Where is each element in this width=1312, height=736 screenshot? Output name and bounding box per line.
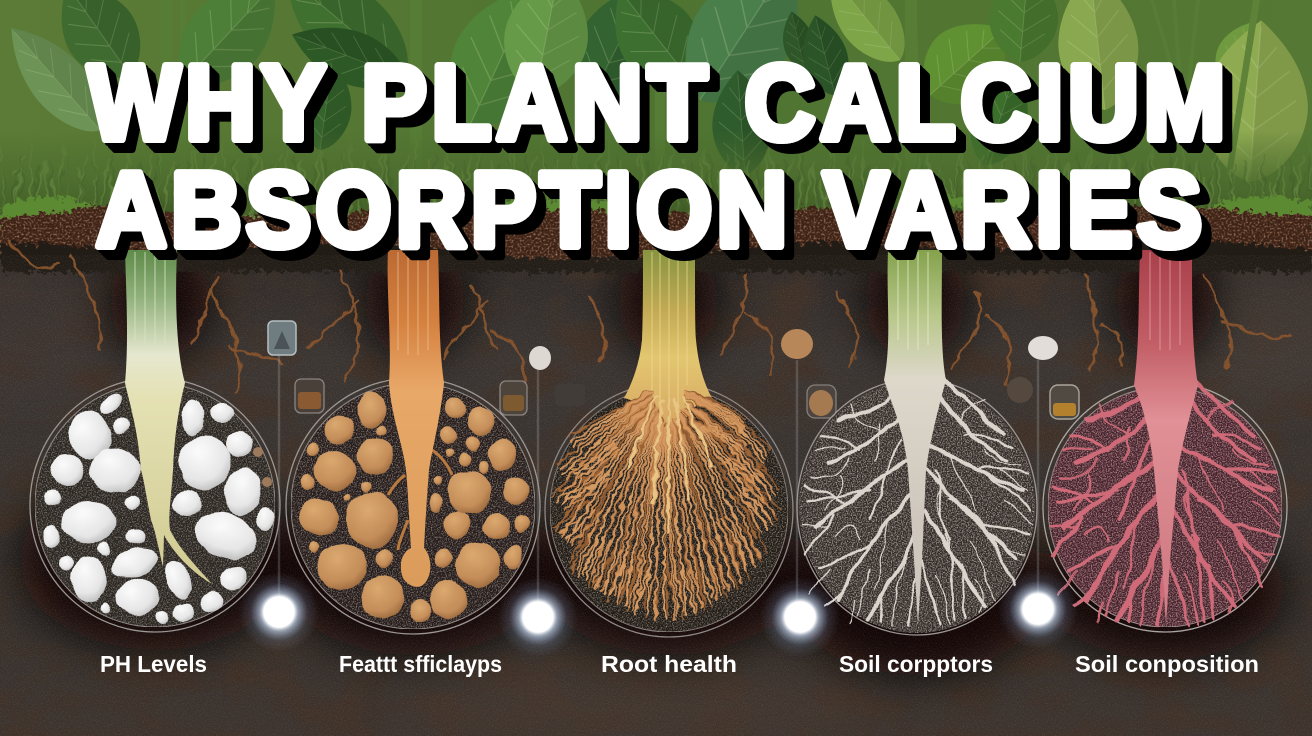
indicator lines [279, 350, 1038, 604]
label: PH Levels [100, 651, 207, 677]
panel disc [797, 379, 1037, 635]
plant stem and taproot [388, 250, 452, 587]
label: Feattt sfficlayps [339, 651, 502, 677]
icon: glass jar 2 [295, 379, 324, 413]
panel disc [30, 378, 280, 632]
panel: soil composition [1043, 250, 1287, 677]
panel: soil factors [797, 250, 1037, 677]
pink branching roots [1050, 380, 1281, 626]
title: ABSORPTION VARIES [96, 150, 1202, 269]
probes and sample jars [268, 321, 1079, 604]
plant stem and taproot [884, 250, 946, 625]
dense fibrous roots [542, 383, 789, 629]
label: Soil conposition [1075, 651, 1259, 677]
icon: tan pebble [781, 329, 813, 359]
white branching roots [802, 380, 1032, 625]
icon: glass jar 3 [500, 381, 527, 415]
plant stem flare [624, 250, 712, 430]
topsoil crumbs [0, 206, 1312, 262]
grass band [0, 130, 1312, 220]
icon: dim stones [1007, 377, 1033, 403]
title: WHY PLANT CALCIUM [88, 43, 1225, 162]
soil rootlets [8, 240, 1290, 395]
dark shadows behind panels [20, 240, 1285, 675]
white calcium rocks [44, 390, 273, 623]
panel: pH levels [30, 250, 280, 677]
foliage leaves [0, 0, 1312, 186]
panel disc [286, 378, 540, 634]
plant stem and taproot [1134, 250, 1198, 625]
underground soil background [0, 195, 1312, 736]
icon: white pebble [529, 346, 551, 370]
plant stem and taproot [125, 250, 212, 584]
icon: glass jar 6 [1050, 385, 1079, 419]
label: Soil corpptors [839, 651, 993, 677]
label: Root health [601, 651, 737, 677]
glowing indicator lights [239, 569, 1078, 657]
panel: root health [542, 250, 793, 677]
topsoil strip [0, 205, 1312, 262]
panel disc [1043, 382, 1287, 632]
icon: white pebble 2 [1028, 336, 1058, 360]
panel: fertility [286, 250, 540, 677]
tall grass stem right [1226, 0, 1260, 175]
icon: glass jar 1 [268, 321, 296, 355]
tan specks [253, 447, 272, 487]
plant stalks [160, 0, 1200, 240]
panel disc [545, 383, 793, 637]
soil grain [0, 255, 1312, 736]
title [88, 43, 1225, 269]
moss along soil edge [0, 195, 1312, 218]
dark soil edge below topsoil [0, 240, 1312, 272]
icon: glass jar 4 (dim) [555, 384, 585, 406]
background: sky and foliage [0, 0, 1312, 232]
icon: glass jar 5 [807, 385, 836, 418]
tan clay nodules [299, 392, 529, 623]
